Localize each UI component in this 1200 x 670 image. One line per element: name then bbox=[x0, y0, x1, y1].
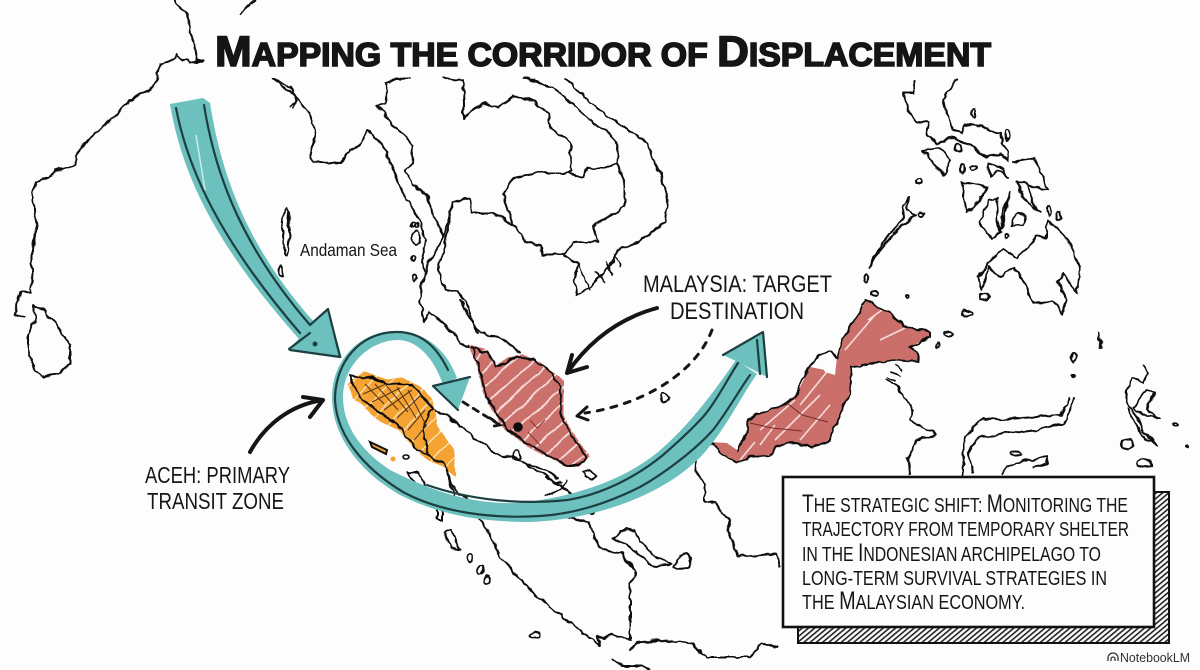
label: Malaysia target destination: DESTINATION bbox=[670, 298, 804, 325]
region: Peninsular Malaysia in red bbox=[470, 346, 589, 467]
land outlines: Borneo, Sulawesi, Philippines bbox=[612, 80, 1188, 569]
arrow: entry route from Bay of Bengal bbox=[170, 98, 342, 358]
label: Malaysia target destination: MALAYSIA: TARGET bbox=[643, 271, 832, 298]
label: Aceh primary transit zone: ACEH: PRIMARY bbox=[145, 462, 290, 488]
arrow: label arrow to Malaysia bbox=[567, 308, 657, 373]
land outlines: Sumatra and Java bbox=[407, 408, 777, 670]
arrowhead: dotted east path bbox=[577, 407, 588, 420]
land outlines: mainland south and southeast Asia bbox=[14, 0, 667, 353]
label: Andaman Sea: Andaman Sea bbox=[300, 240, 397, 260]
callout: strategic shift bbox=[783, 477, 1169, 643]
label: Malaysia target destination bbox=[643, 271, 832, 325]
arrow: loop around Aceh towards Malaysia and Borneo bbox=[332, 331, 767, 522]
callout: strategic shift: THE MALAYSIAN ECONOMY. bbox=[802, 587, 1025, 615]
title: MAPPING THE CORRIDOR OF DISPLACEMENT bbox=[215, 28, 991, 76]
land outline: Sri Lanka bbox=[28, 305, 70, 378]
callout: strategic shift: IN THE INDONESIAN ARCHIPELAGO TO bbox=[802, 539, 1101, 567]
arrow: dotted path into Malaysia from the west bbox=[463, 402, 500, 427]
region: East Malaysia in red bbox=[710, 300, 930, 463]
callout: strategic shift: LONG-TERM SURVIVAL STRATEGIES IN bbox=[802, 567, 1107, 590]
arrow: dotted path to Malaysia from the east bbox=[585, 330, 712, 413]
label: Aceh primary transit zone: TRANSIT ZONE bbox=[147, 488, 284, 514]
hatching over Aceh bbox=[363, 384, 427, 440]
label: Aceh primary transit zone bbox=[145, 462, 290, 514]
callout: strategic shift: THE STRATEGIC SHIFT: MONITORING THE bbox=[802, 490, 1128, 518]
region: Aceh transit zone in orange bbox=[347, 370, 470, 503]
marker: Kuala Lumpur point bbox=[513, 422, 523, 432]
logo: NotebookLM: NotebookLM bbox=[1120, 650, 1190, 665]
arrow: label arrow to Aceh bbox=[250, 397, 323, 452]
